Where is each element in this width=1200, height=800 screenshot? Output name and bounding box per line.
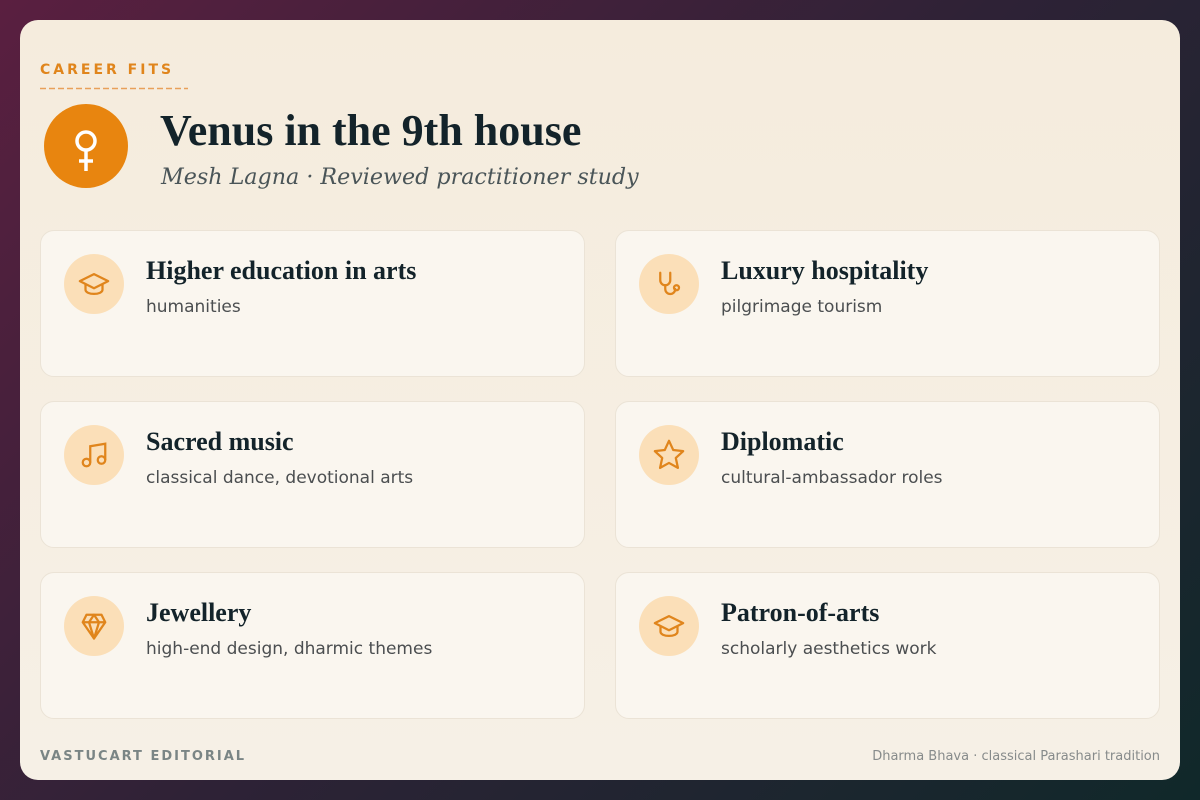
tile: diplomatic <box>615 401 1160 548</box>
tile: diplomatic: Diplomatic <box>721 427 844 456</box>
tile: higher education: humanities <box>146 297 241 317</box>
icon: graduation cap <box>64 254 124 314</box>
icon: stethoscope <box>639 254 699 314</box>
tile: patron of arts <box>615 572 1160 719</box>
tile: diplomatic: cultural-ambassador roles <box>721 468 943 488</box>
subtitle: Mesh Lagna · Reviewed practitioner study <box>161 164 639 190</box>
title: Venus in the 9th house <box>160 106 581 155</box>
tile: sacred music: classical dance, devotional arts <box>146 468 413 488</box>
icon: graduation cap <box>639 596 699 656</box>
tile: jewellery: Jewellery <box>146 598 251 627</box>
tile: luxury hospitality <box>615 230 1160 377</box>
tile: jewellery <box>40 572 585 719</box>
tile: patron of arts: scholarly aesthetics work <box>721 639 936 659</box>
tile: patron of arts: Patron-of-arts <box>721 598 879 627</box>
icon: venus <box>44 104 128 188</box>
tile: luxury hospitality: pilgrimage tourism <box>721 297 882 317</box>
tile: higher education <box>40 230 585 377</box>
eyebrow label: CAREER FITS <box>40 62 174 78</box>
icon: star <box>639 425 699 485</box>
footer brand: VASTUCART EDITORIAL <box>40 749 246 764</box>
icon: gem <box>64 596 124 656</box>
icon: music note <box>64 425 124 485</box>
tile: sacred music <box>40 401 585 548</box>
footer source: Dharma Bhava · classical Parashari tradition <box>872 749 1160 764</box>
tile: sacred music: Sacred music <box>146 427 294 456</box>
tile: luxury hospitality: Luxury hospitality <box>721 256 928 285</box>
tile: jewellery: high-end design, dharmic themes <box>146 639 432 659</box>
tile: higher education: Higher education in arts <box>146 256 416 285</box>
